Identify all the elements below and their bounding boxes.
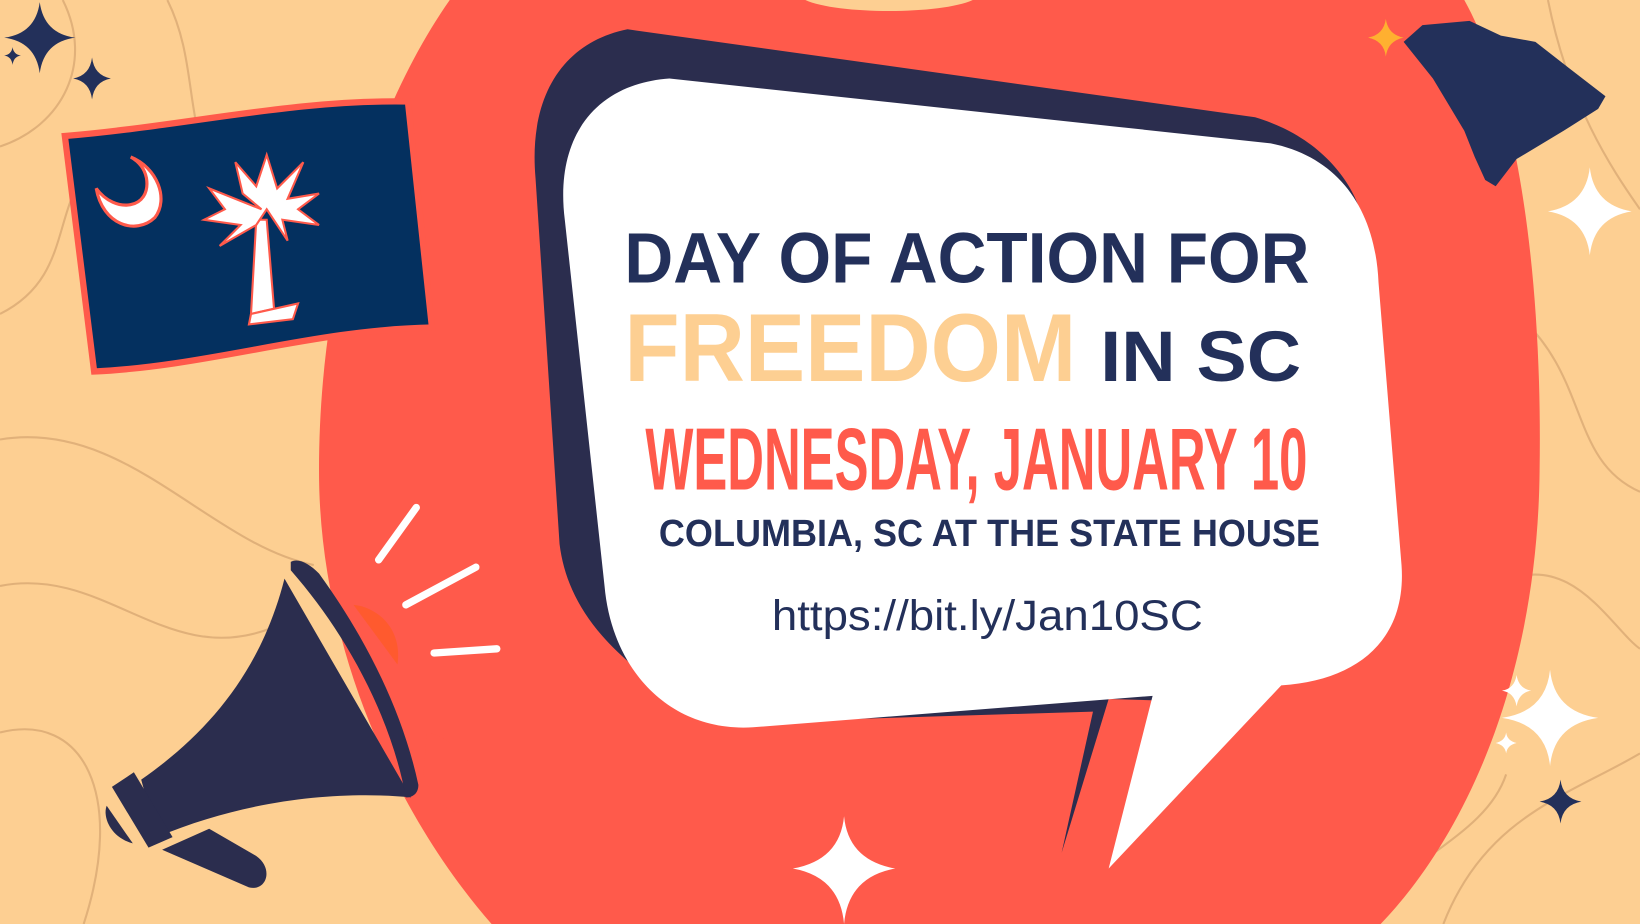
location: COLUMBIA, SC AT THE STATE HOUSE	[659, 512, 1320, 554]
url: https://bit.ly/Jan10SC	[772, 592, 1203, 640]
flag palmetto	[204, 155, 319, 324]
SC state map	[1404, 21, 1605, 186]
title line 1: DAY OF ACTION FOR	[624, 220, 1309, 299]
megaphone	[106, 560, 480, 888]
flag crescent	[96, 157, 161, 226]
speech bubble shadow	[535, 29, 1360, 853]
speech bubble	[563, 78, 1402, 869]
title IN SC: IN SC	[1100, 318, 1301, 397]
red background blob	[319, 0, 1540, 924]
title line 2: FREEDOM	[624, 295, 1076, 402]
sound lines	[379, 508, 497, 653]
flag	[65, 101, 432, 371]
